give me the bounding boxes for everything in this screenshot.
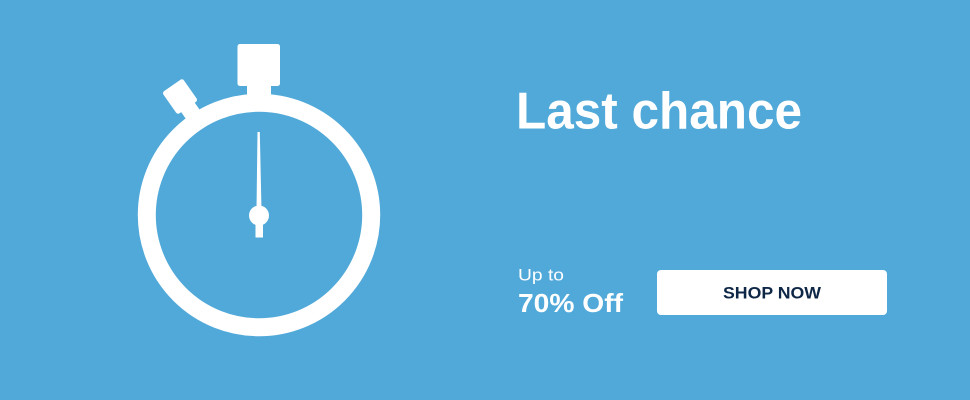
discount text <box>518 266 623 318</box>
stopwatch ring <box>147 103 371 327</box>
stopwatch hand <box>249 132 269 238</box>
discount value: 70% Off <box>518 288 623 318</box>
heading: Last chance <box>516 82 802 140</box>
button: shop now: SHOP NOW <box>723 284 822 302</box>
stopwatch side button <box>162 78 205 125</box>
button: shop now <box>657 270 887 315</box>
stopwatch crown <box>238 44 280 98</box>
icon: stopwatch <box>147 44 371 327</box>
discount label: Up to <box>518 266 564 284</box>
